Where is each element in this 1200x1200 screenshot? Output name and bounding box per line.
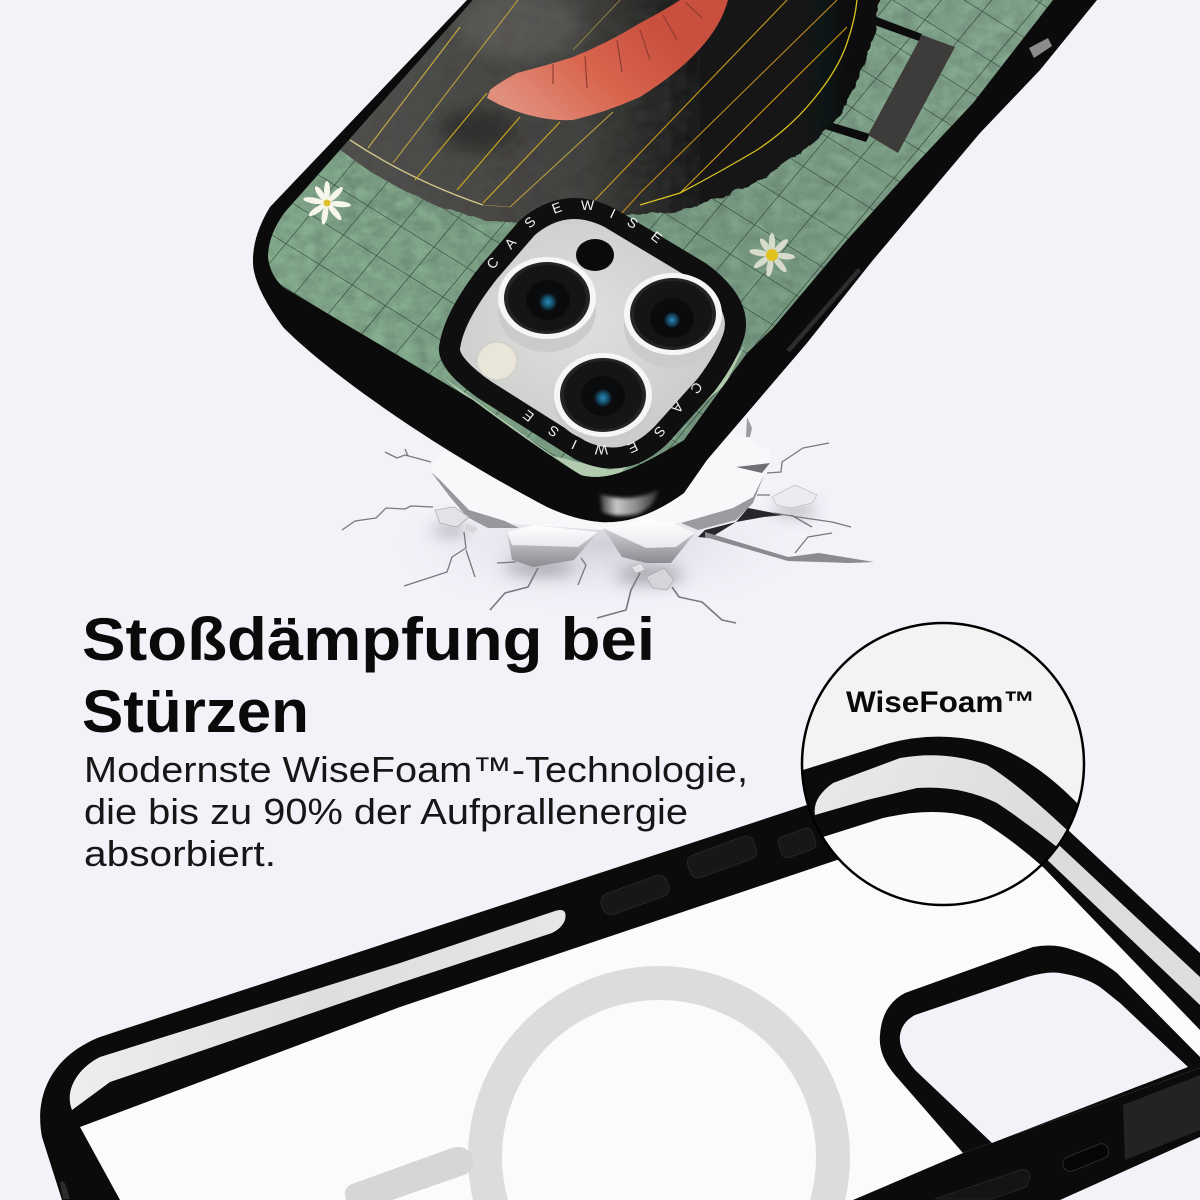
raised white surface <box>431 420 770 530</box>
left side hole <box>60 1182 70 1199</box>
ring text top: CASEWISE <box>483 197 665 272</box>
left clear strip <box>70 910 566 1110</box>
rock right <box>772 485 817 508</box>
main wedge crack <box>705 532 874 563</box>
camera cutout window <box>900 972 1188 1143</box>
magnifier circle <box>800 622 1086 906</box>
dark wedge <box>698 508 784 538</box>
left crater rim <box>431 472 519 528</box>
camera cutout <box>880 946 1200 1153</box>
bottom clear case <box>40 748 1200 1200</box>
case body <box>253 0 1097 522</box>
lens one <box>498 257 596 352</box>
notch <box>736 463 770 473</box>
magnified frame <box>803 736 1078 864</box>
post crack <box>746 417 752 437</box>
rock chunk centre-right <box>603 520 695 563</box>
side button long <box>786 268 861 352</box>
magnifier outline <box>802 623 1084 905</box>
ring text bottom: CASEWISE <box>520 379 706 458</box>
body text: Modernste WiseFoam™-Technologie, <box>84 749 748 790</box>
right clear strip <box>1000 790 1200 1005</box>
body text: die bis zu 90% der Aufprallenergie <box>84 791 688 832</box>
heading: Stürzen <box>82 678 309 745</box>
camera hole <box>576 239 614 271</box>
camera ring <box>449 209 736 458</box>
small rock bottom <box>646 568 674 590</box>
heading <box>82 606 655 745</box>
side button highlight <box>1029 38 1052 58</box>
lens two <box>624 273 722 368</box>
camera island <box>449 197 736 458</box>
chunk shadows <box>432 505 817 583</box>
pan handle grip <box>868 35 955 153</box>
case frame <box>40 748 1200 1200</box>
tiny rock left <box>466 523 478 533</box>
lens three <box>554 353 652 442</box>
sausage <box>487 0 728 120</box>
yellow strings <box>350 0 857 215</box>
sausage marks <box>553 2 702 88</box>
handle arm <box>825 16 922 142</box>
magnified clear strip <box>815 755 1067 847</box>
daisy right <box>749 233 795 277</box>
magnifier fill <box>802 623 1084 905</box>
lower band texture <box>1123 1075 1200 1160</box>
right crater rim <box>681 475 764 530</box>
green tiles <box>250 0 1080 500</box>
small rock left <box>435 507 469 527</box>
corner highlight <box>600 490 658 516</box>
light strip at edge <box>440 345 745 490</box>
clear back panel <box>80 820 1200 1200</box>
soft ground shadow <box>370 470 830 620</box>
heading: Stoßdämpfung bei <box>82 606 655 673</box>
magnified black rim <box>803 736 1078 864</box>
magsafe bar <box>345 1147 473 1200</box>
WiseFoam label: WiseFoam™ <box>846 686 1035 719</box>
steam <box>460 0 580 60</box>
top phone with case <box>250 0 1097 522</box>
cracked ground impact <box>342 417 874 623</box>
magsafe ring <box>468 966 850 1200</box>
daisy left <box>303 181 351 225</box>
crack lines <box>342 443 851 623</box>
flash <box>477 342 517 380</box>
rock chunk centre-left <box>507 525 598 567</box>
dark smudge <box>440 110 516 150</box>
body text <box>84 749 748 874</box>
button slots <box>598 827 1111 1199</box>
tiny rock bottom <box>631 563 645 573</box>
artwork screen <box>250 0 1080 500</box>
magnified panel <box>824 812 1040 904</box>
frying pan <box>340 0 885 224</box>
body text: absorbiert. <box>84 833 276 874</box>
